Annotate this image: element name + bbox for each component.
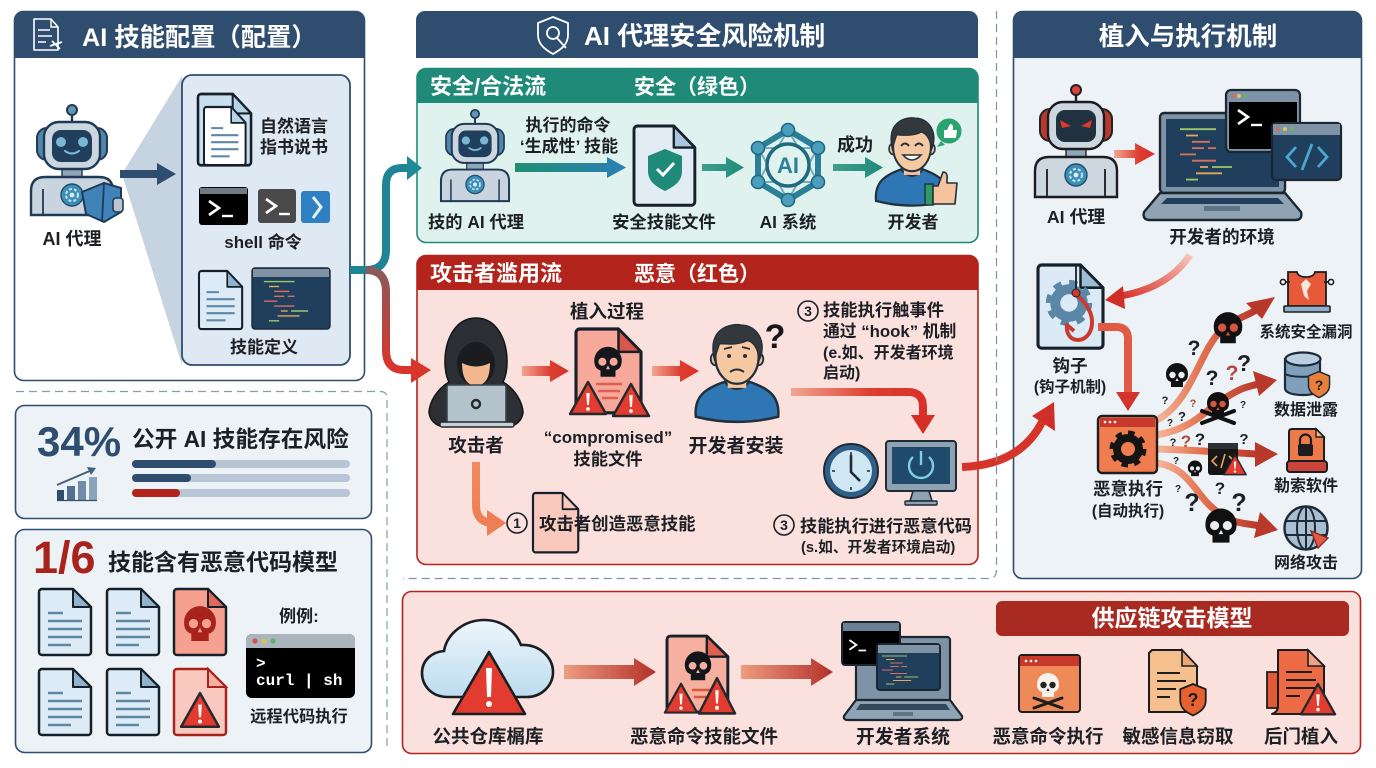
- text: step 3 hook trigger: 3: [804, 303, 812, 319]
- label: developer: 开发者: [888, 212, 938, 232]
- chart icon: rising bars: [57, 467, 97, 500]
- icon: AI system network: AI: [777, 153, 799, 178]
- heading: AI agent security risk mechanism: [416, 11, 978, 58]
- icon: hook file: [1038, 265, 1103, 348]
- icon: shell terminals: [199, 187, 330, 225]
- statistic: 34 percent: 34%: [37, 418, 121, 465]
- label: example: 例例:: [279, 607, 319, 626]
- icon: malicious skill draft file: [533, 493, 578, 552]
- icon: malicious command skill file: [665, 636, 735, 713]
- dashed outline around central flows: [403, 11, 996, 578]
- arrow: environment to hook: [1105, 255, 1190, 309]
- icon: natural language documents: [198, 94, 251, 165]
- arrow: file to AI system: [702, 157, 744, 178]
- question marks scattered around attack paths: ?: [1237, 350, 1251, 376]
- heading: AI skill configuration: [14, 11, 365, 58]
- icon: monitor with power symbol: [886, 441, 956, 505]
- connector: skill config splits into safe and malicious flows: [350, 156, 431, 383]
- heading: attacker abuse flow: 恶意（红色）: [634, 262, 760, 286]
- question marks scattered around attack paths: ?: [1195, 430, 1205, 449]
- label: remote code execution: 远程代码执行: [250, 707, 348, 726]
- question marks scattered around attack paths: [1162, 337, 1251, 517]
- question marks scattered around attack paths: ?: [1173, 456, 1179, 467]
- label: backdoor implant: 后门植入: [1264, 726, 1338, 747]
- icon: developer system laptop: [842, 622, 962, 720]
- arrow: agent to developer environment: [1114, 143, 1155, 165]
- text: step 1 attacker creates malicious skill: 1: [513, 515, 521, 531]
- label: success: 成功: [837, 134, 873, 155]
- label: shell commands: shell 命令: [224, 232, 302, 252]
- question marks scattered around attack paths: ?: [1190, 398, 1197, 410]
- icon: malicious AI agent: [1035, 85, 1117, 197]
- heading: attacker abuse flow: [417, 255, 978, 290]
- question marks scattered around attack paths: ?: [1181, 432, 1191, 451]
- panel: supply chain attack model: [402, 592, 1360, 754]
- icon: public repository cloud with warning: [422, 620, 553, 714]
- arrow: execution spreads to ransomware: [1157, 442, 1278, 467]
- label: skill definition: 技能定义: [230, 337, 298, 357]
- label: malicious execution: [1092, 479, 1164, 520]
- icon: data leak database: ?: [1315, 377, 1323, 393]
- panel: one in six statistic: [16, 530, 372, 752]
- icon: safe skill file: [634, 126, 695, 205]
- question marks scattered around attack paths: ?: [1178, 409, 1186, 424]
- label: compromised skill file: [544, 428, 672, 469]
- heading: safe flow: [417, 68, 978, 103]
- icon: benign AI agent: [441, 110, 509, 201]
- heading: AI agent security risk mechanism: AI 代理安全风险机制: [584, 21, 825, 51]
- question marks scattered around attack paths: ?: [1175, 484, 1181, 495]
- text: public AI skills at risk: 公开 AI 技能存在风险: [132, 426, 349, 452]
- heading: implant and execution mechanism: [1013, 11, 1362, 58]
- icon: malicious execution window: [1098, 416, 1157, 473]
- heading: attacker abuse flow: 攻击者滥用流: [430, 261, 562, 286]
- icon: network attack globe: [1284, 506, 1328, 550]
- label: AI agent: AI 代理: [42, 229, 102, 249]
- label: hook mechanism: (钩子机制): [1034, 377, 1106, 396]
- icon: happy developer with thumbs up: [876, 118, 962, 206]
- panel: attacker abuse flow: [417, 255, 978, 564]
- icon: backdoor implant: [1267, 650, 1335, 714]
- icon: curl pipe sh terminal: curl | sh: [256, 672, 342, 690]
- icon: malicious code window with warning: [1208, 443, 1246, 475]
- arrow: execution spreads to system vulnerability: [1157, 297, 1275, 420]
- icon: skill definition file and code: [199, 268, 330, 329]
- icons: grid of skill files: [39, 589, 226, 735]
- heading: implant and execution mechanism: 植入与执行机制: [1099, 22, 1277, 51]
- text: step 3 skill executes malicious code: (s.如、开发者环境启动): [801, 538, 955, 556]
- label: malicious command execution: 恶意命令执行: [992, 726, 1104, 747]
- label: skilled AI agent: 技的 AI 代理: [428, 212, 524, 232]
- text: step 3 skill executes malicious code: 技能执行进行恶意代码: [800, 516, 972, 536]
- statistic: 1/6: 1/6: [33, 532, 96, 583]
- icon: compromised skill file: [570, 329, 649, 416]
- text: command generating skill: 执行的命令: [526, 115, 610, 135]
- text: step 3 skill executes malicious code: 3: [780, 517, 788, 533]
- heading: safe flow: 安全（绿色）: [634, 75, 760, 99]
- text: skills contain malicious code: 技能含有恶意代码模型: [108, 549, 338, 575]
- text: natural language instructions: 指书说书: [260, 138, 328, 157]
- panel: skill contents: [182, 75, 350, 365]
- label: malicious command skill file: 恶意命令技能文件: [630, 726, 778, 747]
- icon: curl pipe sh terminal: >: [256, 655, 266, 673]
- label: developer installs: 开发者安装: [688, 434, 784, 457]
- icon: AI agent reading a book: [31, 105, 123, 222]
- arrow: skill file to developer system: [741, 658, 833, 686]
- arrow: system to developer: [833, 157, 883, 178]
- icon: malicious command execution: [1019, 655, 1080, 712]
- question marks scattered around attack paths: ?: [1184, 489, 1200, 517]
- panel: 34 percent statistic: [16, 406, 372, 518]
- arrow: repository to malicious skill file: [564, 658, 656, 686]
- arrow: execution spreads to data leak: [1157, 371, 1277, 435]
- label: data leak: 数据泄露: [1274, 401, 1338, 419]
- label: attacker: 攻击者: [448, 435, 504, 456]
- icon: system vulnerability: [1280, 272, 1334, 312]
- text: step 3 hook trigger: (e.如、开发者环境: [823, 343, 954, 362]
- question marks scattered around attack paths: ?: [1239, 431, 1249, 448]
- heading: supply chain attack model: [996, 601, 1349, 636]
- text: step 3 hook trigger: 启动): [823, 363, 860, 382]
- label: network attack: 网络攻击: [1274, 553, 1338, 572]
- panel: implant and execution mechanism: [1013, 11, 1362, 578]
- label: developer environment: 开发者的环境: [1169, 227, 1275, 247]
- arrow: execution trigger to hook mechanism: [962, 402, 1055, 467]
- label: system vulnerability: 系统安全漏洞: [1259, 322, 1353, 341]
- icon: AI system network: [752, 124, 824, 206]
- icon: confused developer: [696, 318, 785, 422]
- question marks scattered around attack paths: ?: [1170, 437, 1177, 449]
- label: AI agent: AI 代理: [1047, 207, 1105, 227]
- arrow: install to execution trigger: [791, 392, 923, 416]
- question marks scattered around attack paths: ?: [1206, 367, 1218, 390]
- text: natural language instructions: [260, 116, 328, 157]
- text: command generating skill: [520, 115, 618, 156]
- icon: clock: [824, 444, 878, 498]
- label: hook mechanism: [1034, 356, 1106, 396]
- label: ransomware: 勒索软件: [1274, 477, 1338, 495]
- icons: skulls on attack paths: [1166, 312, 1242, 543]
- label: malicious execution: 恶意执行: [1093, 479, 1163, 499]
- label: sensitive information theft: 敏感信息窃取: [1122, 726, 1234, 747]
- dashed outline around stats: [16, 392, 387, 746]
- arrow: execution spreads to network attack: [1157, 463, 1278, 538]
- detail fan from agent to skill contents: [122, 76, 182, 365]
- question marks scattered around attack paths: ?: [1188, 337, 1200, 360]
- arrow: compromised file to developer: [652, 360, 699, 382]
- icon: developer environment laptop: [1144, 90, 1341, 220]
- label: developer system: 开发者系统: [856, 725, 950, 747]
- label: hook mechanism: 钩子: [1052, 356, 1088, 376]
- heading: supply chain attack model: 供应链攻击模型: [1092, 605, 1252, 631]
- icon: ransomware: [1287, 429, 1327, 472]
- panel: safe legitimate flow: [417, 68, 978, 242]
- icon: confused developer: ?: [765, 318, 785, 356]
- text: step 3 hook trigger: 通过 “hook” 机制: [823, 322, 956, 341]
- text: step 3 skill executes malicious code: [774, 515, 972, 556]
- text: command generating skill: ‘生成性’ 技能: [520, 136, 618, 156]
- icon: sensitive information theft: ?: [1188, 690, 1198, 710]
- question marks scattered around attack paths: ?: [1167, 418, 1173, 429]
- chart: risk progress bars: [132, 460, 350, 497]
- question marks scattered around attack paths: ?: [1231, 489, 1247, 517]
- label: compromised skill file: 技能文件: [573, 449, 643, 469]
- question marks scattered around attack paths: ?: [1215, 479, 1225, 498]
- arrow: agent to safe file: [515, 157, 626, 178]
- question marks scattered around attack paths: ?: [1162, 395, 1169, 407]
- text: natural language instructions: 自然语言: [260, 116, 328, 136]
- question marks scattered around attack paths: ?: [1226, 362, 1238, 385]
- question marks scattered around attack paths: ?: [1240, 400, 1246, 411]
- label: safe skill file: 安全技能文件: [612, 212, 716, 232]
- arrow: attacker to compromised file: [522, 360, 569, 382]
- label: malicious execution: (自动执行): [1092, 501, 1164, 520]
- heading: safe flow: 安全/合法流: [430, 74, 546, 99]
- icon: data leak database: [1285, 352, 1330, 398]
- label: implant process: 植入过程: [570, 301, 644, 322]
- text: step 3 hook trigger: [798, 300, 956, 382]
- label: compromised skill file: “compromised”: [544, 428, 672, 447]
- arrow: attacker creates malicious skill: [476, 462, 506, 536]
- arrow: hook to malicious execution: [1098, 327, 1140, 411]
- icon: hooded attacker with laptop: [429, 318, 523, 427]
- icon: curl pipe sh terminal: [246, 634, 355, 698]
- label: public repository: 公共仓库榍库: [432, 726, 544, 747]
- arrow: agent to skill contents: [120, 163, 176, 185]
- label: AI system: AI 系统: [760, 212, 816, 232]
- heading: AI skill configuration: AI 技能配置（配置）: [82, 24, 317, 52]
- text: step 3 hook trigger: 技能执行触事件: [823, 300, 944, 320]
- text: step 1 attacker creates malicious skill: 攻击者创造恶意技能: [539, 514, 696, 534]
- panel: AI skill configuration: [14, 11, 365, 380]
- icon: sensitive information theft: [1149, 650, 1206, 716]
